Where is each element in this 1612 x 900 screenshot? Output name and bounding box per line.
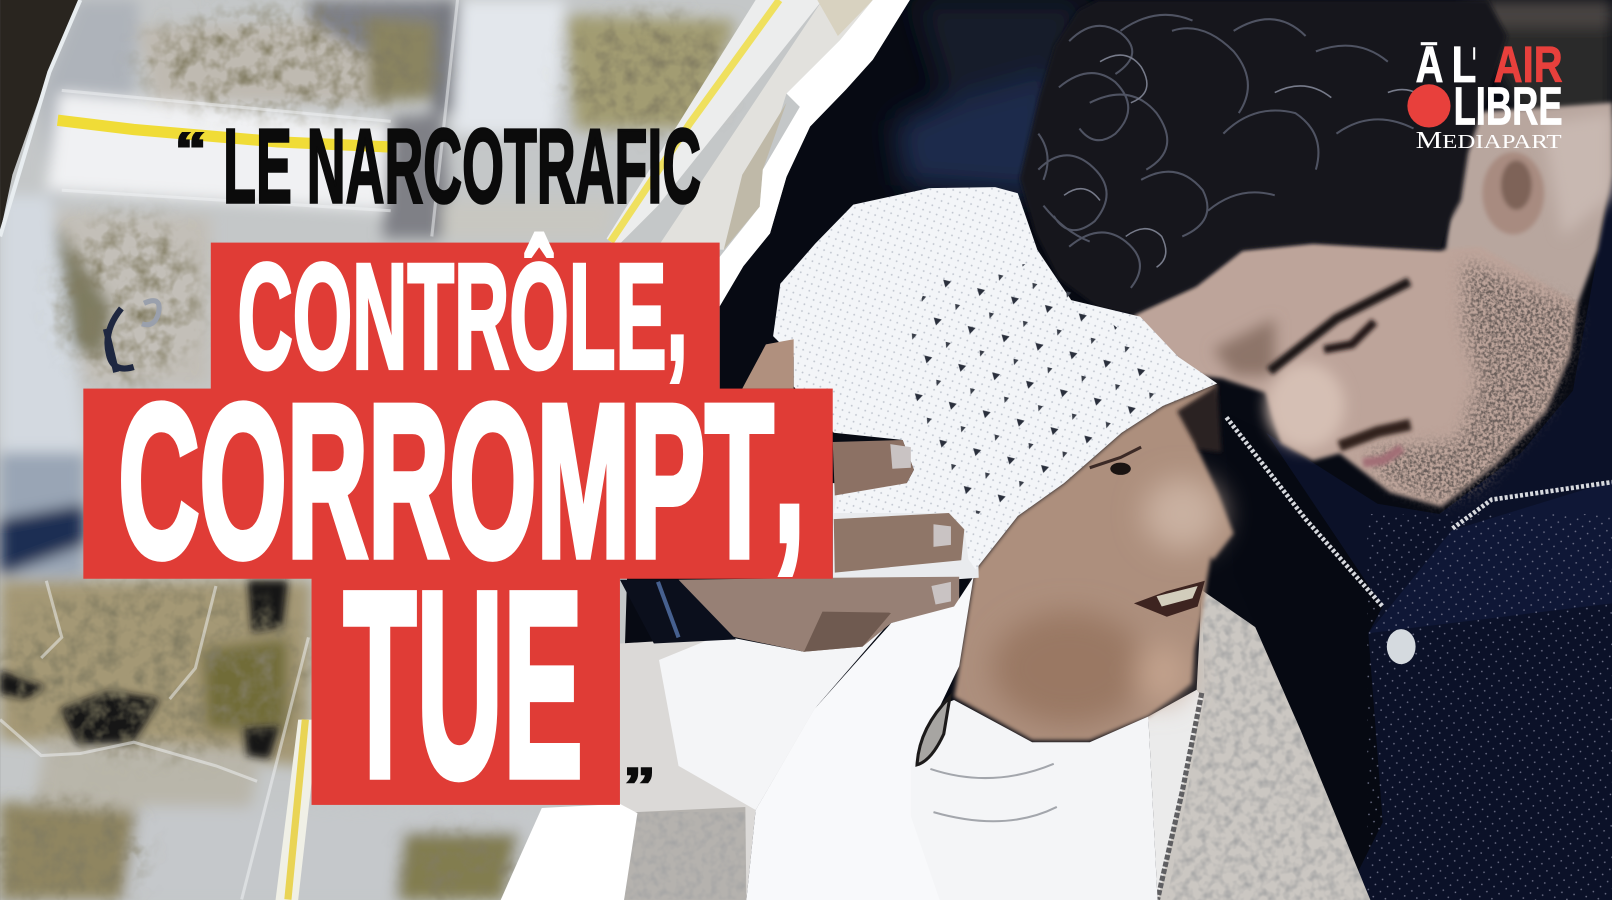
heading: le narcotrafic: “ — [175, 124, 207, 177]
closing quotation mark: ” — [623, 756, 656, 814]
red title blocks — [83, 243, 833, 805]
heading: contrôle, corrompt, tue — [118, 223, 805, 833]
hand on the woman's head — [620, 339, 964, 652]
jacket — [1223, 175, 1612, 900]
bud texture — [0, 10, 730, 900]
heading: le narcotrafic — [175, 108, 701, 226]
beard stubble — [1367, 262, 1578, 504]
dark edge at top left — [0, 0, 78, 233]
heading: contrôle, corrompt, tue: CORROMPT — [118, 360, 1389, 603]
white turtleneck — [903, 700, 1158, 900]
heading: contrôle, corrompt, tue: , — [667, 223, 688, 391]
white hat folds behind the fingers — [833, 483, 979, 588]
panel: photo of cannabis bags — [0, 0, 925, 900]
white scarf — [746, 577, 974, 900]
heading: contrôle, corrompt, tue: TUE — [343, 537, 583, 833]
logo: à l'air libre mediapart — [1407, 35, 1563, 154]
plastic creases — [0, 0, 458, 899]
heading: le narcotrafic: LE NARCOTRAFIC — [223, 108, 701, 226]
logo: à l'air libre mediapart: L — [1452, 35, 1476, 93]
heading: contrôle, corrompt, tue: CONTRÔLE — [238, 232, 1080, 400]
zip-bag yellow stripes — [58, 120, 391, 147]
white knit hat — [773, 187, 1217, 570]
woman's face — [954, 383, 1234, 740]
logo: à l'air libre mediapart: AIR — [1494, 35, 1563, 93]
torn paper edges — [501, 0, 910, 900]
logo: à l'air libre mediapart: LIBRE — [1454, 77, 1563, 136]
handwriting on the bag — [106, 308, 134, 372]
fleece coat — [620, 590, 1370, 900]
man's neck, ear and face — [1133, 103, 1612, 507]
jacket zippers, button and cord — [1226, 417, 1612, 780]
panel: photo of the two people — [620, 0, 1612, 900]
logo: à l'air libre mediapart: A — [1416, 35, 1443, 93]
man's curly hair — [1020, 0, 1507, 315]
heading: contrôle, corrompt, tue: , — [774, 344, 805, 587]
dark patches seen through the plastic — [0, 581, 288, 759]
logo: à l'air libre mediapart: MEDIAPART — [1416, 127, 1562, 154]
